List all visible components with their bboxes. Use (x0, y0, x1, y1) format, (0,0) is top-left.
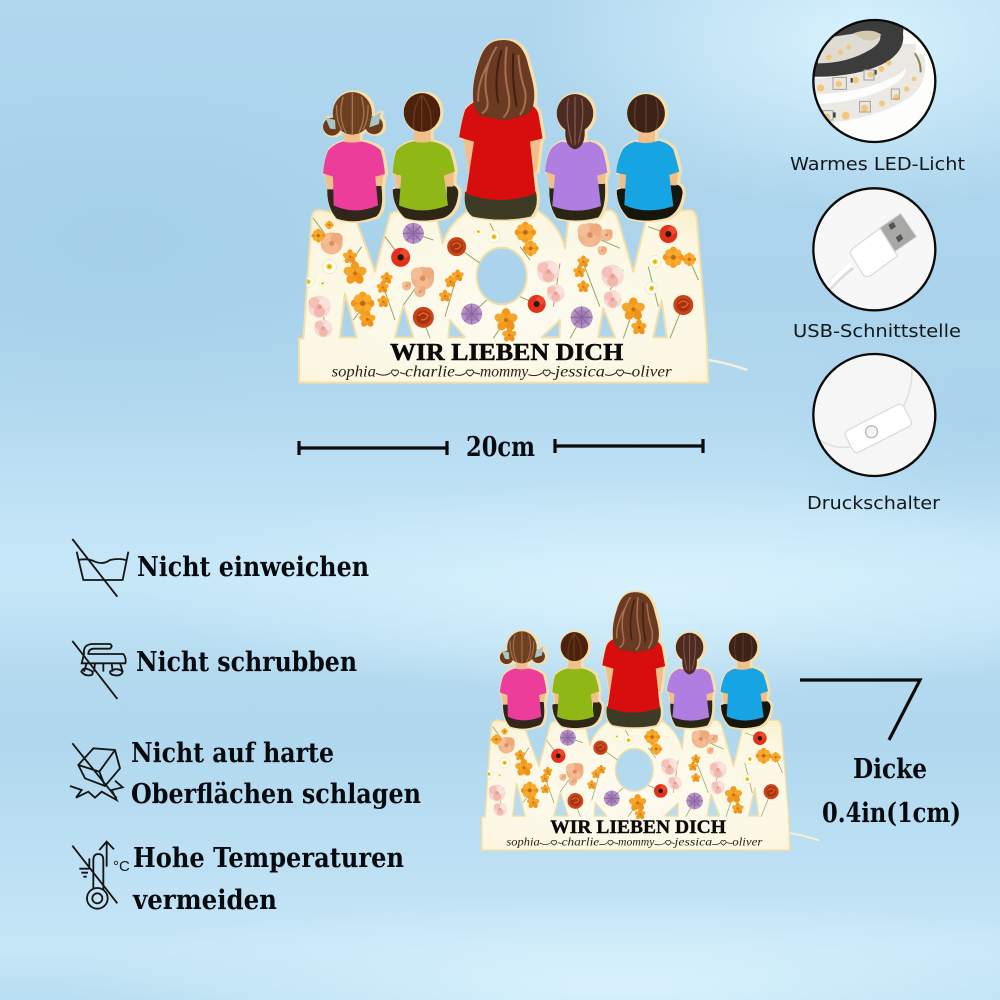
engraved text on large lamp: WIR LIEBEN DICH (390, 339, 623, 366)
lamp cable (708, 360, 747, 370)
care item: do not soak (72, 539, 369, 597)
engraved text on large lamp: charlie (405, 364, 455, 381)
thickness label: 0.4in(1cm) (822, 798, 961, 829)
care item: do not hit on hard surfaces (70, 738, 421, 810)
care item: do not hit on hard surfaces: Nicht auf harte (131, 738, 334, 769)
care item: avoid high temperatures: °C (113, 858, 130, 875)
engraved text on small lamp (506, 817, 763, 849)
engraved text on small lamp: jessica (672, 837, 712, 849)
USB photo and label (793, 185, 961, 342)
wooden MOM letters with base plate (299, 201, 708, 383)
care item: avoid high temperatures: Hohe Temperaturen (133, 843, 404, 874)
large MOM lamp (299, 40, 747, 383)
girl in pink shirt (323, 92, 385, 221)
care item: avoid high temperatures (72, 842, 404, 916)
LED photo and label: Warmes LED-Licht (790, 154, 965, 175)
engraved text on large lamp: oliver (632, 364, 673, 381)
engraved text on small lamp: WIR LIEBEN DICH (550, 817, 727, 838)
care item: avoid high temperatures: vermeiden (132, 885, 277, 916)
thickness label (822, 754, 961, 829)
engraved text on large lamp: jessica (553, 364, 605, 381)
engraved text on small lamp: mommy (618, 837, 655, 849)
name connectors with hearts (376, 370, 632, 376)
care item: do not scrub (72, 641, 357, 699)
engraved text on large lamp: mommy (480, 364, 529, 381)
icon: crossed thermometer (72, 842, 117, 909)
push switch photo and label (807, 352, 941, 514)
engraved text on large lamp (332, 339, 673, 381)
boy in blue shirt (616, 94, 683, 221)
engraved text on large lamp: sophia (332, 364, 376, 381)
push switch photo and label: Druckschalter (807, 493, 941, 514)
width dimension: 20cm (299, 432, 703, 463)
icon: crossed wash tub (72, 539, 128, 597)
boy in green shirt (393, 93, 458, 221)
engraved text on small lamp: charlie (562, 837, 599, 849)
small MOM lamp (482, 592, 819, 850)
care item: do not soak: Nicht einweichen (137, 552, 369, 583)
icon: crossed brush (72, 641, 126, 699)
LED photo and label (790, 14, 965, 175)
mother in red shirt (459, 40, 543, 220)
width dimension: 20cm: 20cm (466, 432, 535, 463)
USB photo and label: USB-Schnittstelle (793, 321, 961, 342)
care item: do not scrub: Nicht schrubben (136, 647, 357, 678)
thickness label: Dicke (853, 754, 927, 785)
icon: crossed cube on impact (70, 743, 123, 800)
floral pattern (303, 218, 698, 343)
engraved text on small lamp: oliver (732, 837, 763, 849)
figures seen from behind (323, 40, 683, 221)
care item: do not hit on hard surfaces: Oberflächen schlagen (131, 779, 421, 810)
engraved text on small lamp: sophia (506, 837, 540, 849)
girl in purple shirt (545, 94, 607, 221)
thickness pointer line (800, 680, 920, 740)
